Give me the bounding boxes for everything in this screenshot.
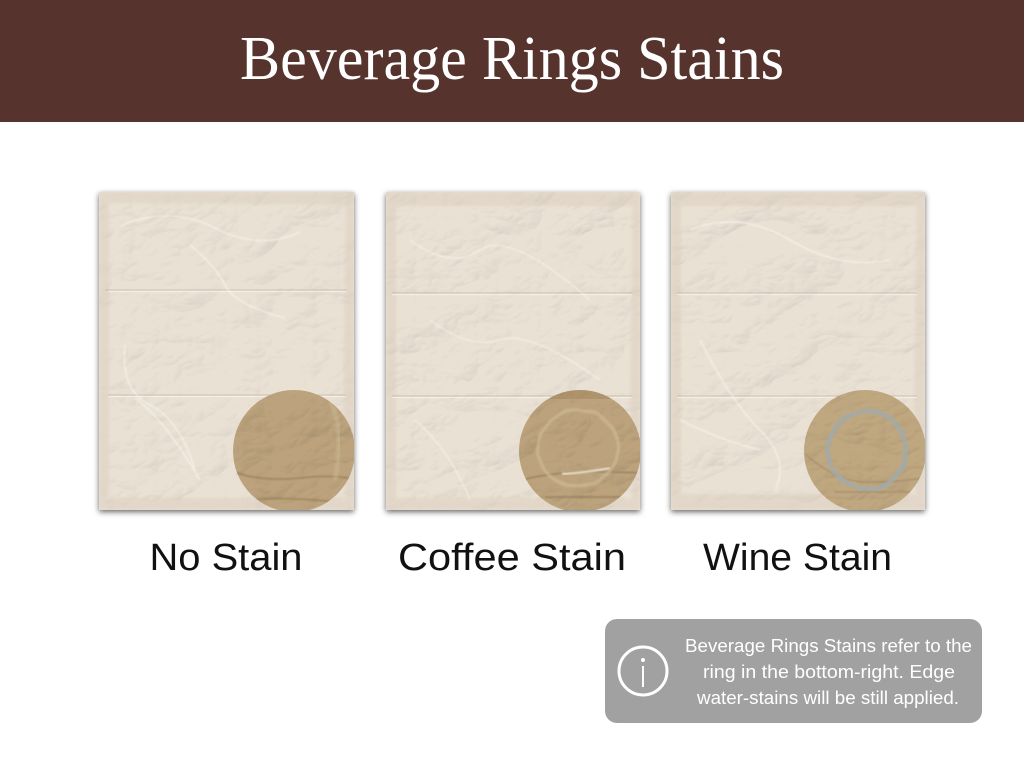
panel: wine stain paper xyxy=(671,192,926,512)
coffee ring xyxy=(538,410,618,486)
label: coffee stain: Coffee Stain xyxy=(398,537,626,579)
title: Beverage Rings Stains xyxy=(240,25,784,93)
label: wine stain: Wine Stain xyxy=(703,537,892,579)
note text xyxy=(685,636,972,708)
note text: Beverage Rings Stains refer to the xyxy=(685,636,972,656)
wine ring xyxy=(828,411,906,489)
note text: ring in the bottom-right. Edge xyxy=(703,662,955,682)
title banner xyxy=(0,0,1024,122)
note text: water-stains will be still applied. xyxy=(696,688,959,708)
icon: info xyxy=(619,647,667,695)
panel: coffee stain paper xyxy=(386,192,648,512)
stain patch xyxy=(804,390,926,512)
stain patch xyxy=(233,390,355,512)
panel: no stain paper xyxy=(99,192,355,512)
label: no stain: No Stain xyxy=(150,537,302,579)
callout: note xyxy=(605,619,982,723)
stain patch xyxy=(519,390,648,512)
